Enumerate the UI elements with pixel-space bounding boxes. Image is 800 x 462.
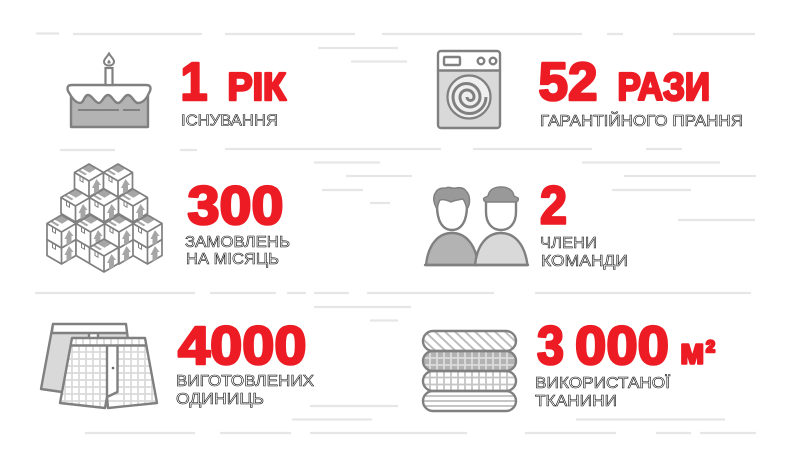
value: 2: 2 xyxy=(540,176,567,236)
caption: існування: ІСНУВАННЯ xyxy=(181,112,278,130)
value: 1 рік xyxy=(180,52,286,112)
icon: stack of boxes xyxy=(47,164,162,272)
value: 4000: 4000 xyxy=(178,316,306,376)
panel: 3000 square metres xyxy=(422,324,716,412)
caption: використаної тканини: ТКАНИНИ xyxy=(535,393,617,410)
panel: 52 washes xyxy=(438,51,743,130)
value: 300: 300 xyxy=(188,176,284,236)
icon: boxer shorts xyxy=(41,324,160,408)
value: 1 рік: РІК xyxy=(228,66,286,109)
caption: виготовлених одиниць: ОДИНИЦЬ xyxy=(176,391,264,408)
caption: виготовлених одиниць: ВИГОТОВЛЕНИХ xyxy=(176,373,314,390)
caption: замовлень на місяць: НА МІСЯЦЬ xyxy=(186,251,279,268)
panel: 2 team members xyxy=(425,176,628,270)
value: 3 000 m2: 3 xyxy=(537,316,564,376)
caption: члени команди: ЧЛЕНИ xyxy=(540,235,597,252)
caption: замовлень на місяць xyxy=(185,234,290,268)
icon: birthday cake xyxy=(68,54,150,127)
value: 3 000 m2 xyxy=(537,316,715,376)
caption: гарантійного прання: ГАРАНТІЙНОГО ПРАННЯ xyxy=(540,111,743,130)
value: 1 рік: 1 xyxy=(180,52,208,112)
icon: two people xyxy=(425,187,528,265)
caption: використаної тканини: ВИКОРИСТАНОЇ xyxy=(535,374,671,392)
value: 3 000 m2: 2 xyxy=(706,337,715,356)
value: 52 рази: РАЗИ xyxy=(618,66,710,109)
value: 3 000 m2: м xyxy=(680,330,704,372)
caption: використаної тканини xyxy=(535,374,671,410)
caption: виготовлених одиниць xyxy=(176,373,314,408)
icon: stack of fabric xyxy=(422,330,518,412)
value: 52 рази: 52 xyxy=(538,52,598,112)
value: 3 000 m2: 000 xyxy=(575,316,669,376)
caption: члени команди xyxy=(540,235,628,270)
value: 52 рази xyxy=(538,52,710,112)
caption: замовлень на місяць: ЗАМОВЛЕНЬ xyxy=(185,234,290,251)
caption: члени команди: КОМАНДИ xyxy=(541,253,628,270)
icon: washing machine xyxy=(438,51,500,128)
panel: one year xyxy=(68,52,286,130)
panel: 4000 units xyxy=(41,316,314,408)
panel: 300 orders xyxy=(47,164,290,272)
